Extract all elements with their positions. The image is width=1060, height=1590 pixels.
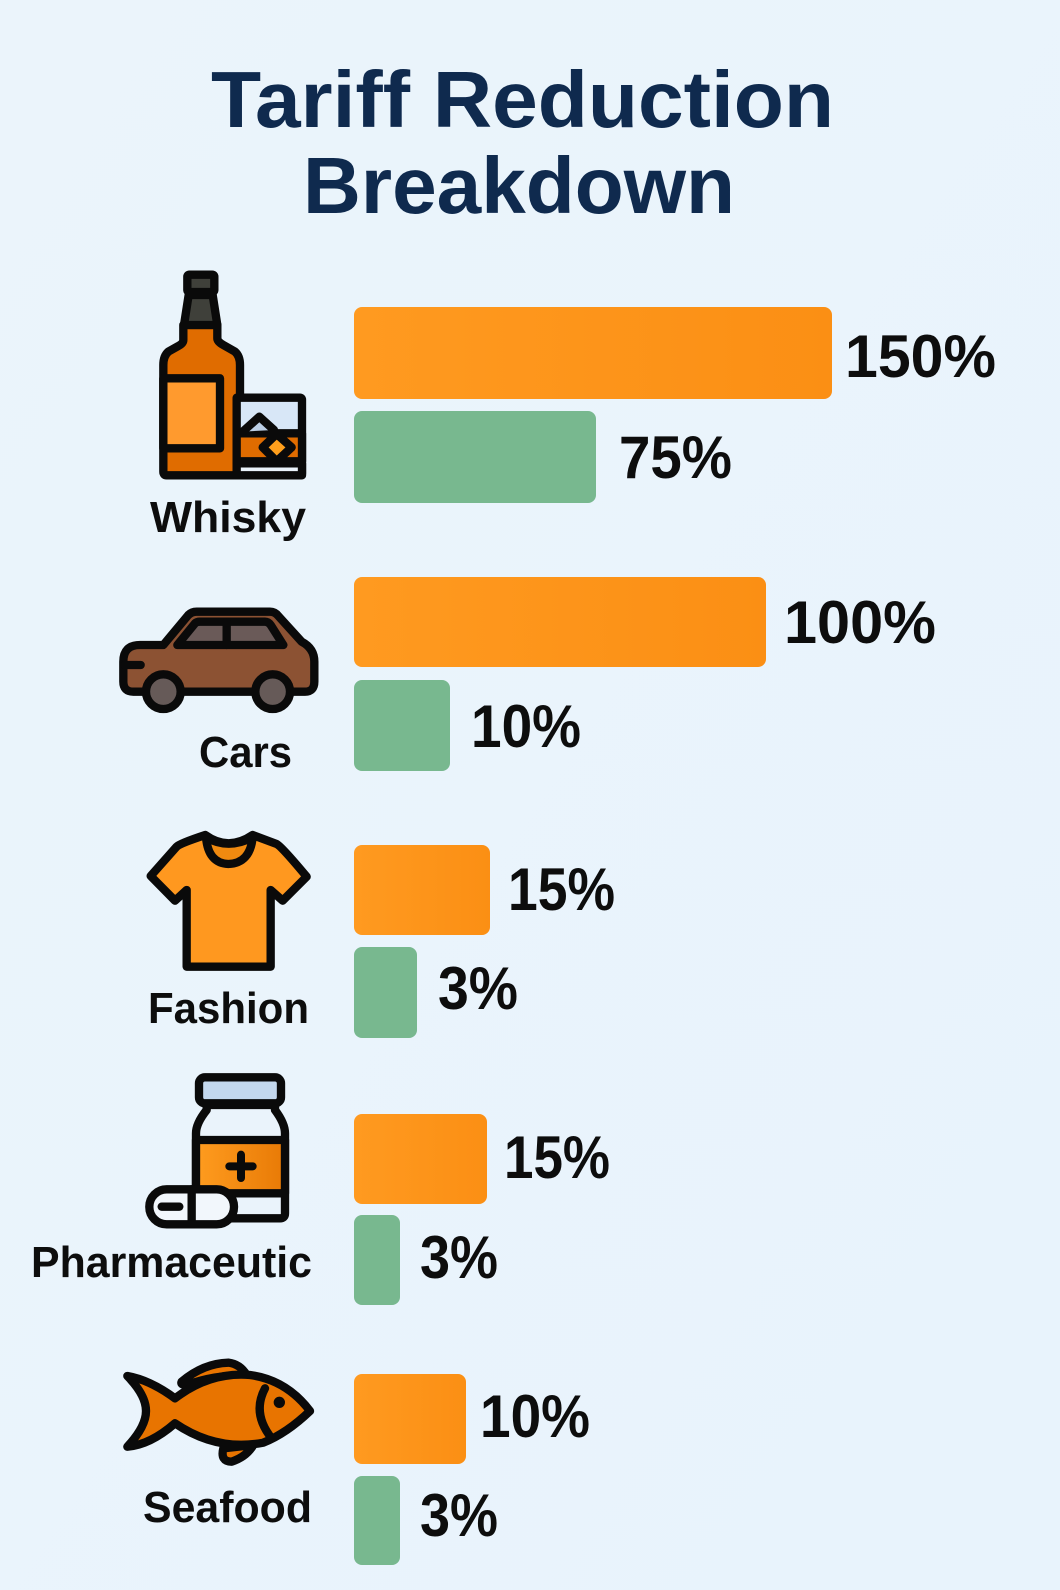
panel: fashion [148, 835, 615, 1038]
label: Fashion: Fashion [148, 984, 309, 1033]
icon: whisky bottle and glass [163, 275, 302, 475]
value: 150%: 150% [845, 323, 996, 390]
icon: fish [127, 1363, 310, 1462]
panel: seafood [127, 1363, 590, 1565]
label: Whisky: Whisky [150, 493, 307, 542]
value: 15%: 15% [504, 1124, 610, 1191]
icon: car [123, 612, 314, 709]
value: 3%: 3% [420, 1482, 498, 1549]
panel: whisky [150, 275, 996, 542]
bar: whisky before [354, 307, 832, 399]
title: Breakdown [303, 141, 735, 230]
value: 10%: 10% [480, 1383, 590, 1450]
title: Tariff Reduction [211, 55, 834, 144]
bar: seafood before [354, 1374, 466, 1464]
bar: pharmaceutic after [354, 1215, 400, 1305]
value: 75%: 75% [619, 424, 732, 491]
value: 100%: 100% [784, 589, 936, 656]
label: Seafood: Seafood [143, 1483, 312, 1532]
bar: seafood after [354, 1476, 400, 1565]
bar: whisky after [354, 411, 596, 503]
bar: fashion before [354, 845, 490, 935]
value: 3%: 3% [420, 1224, 498, 1291]
panel: pharmaceutic [31, 1077, 610, 1305]
bar: fashion after [354, 947, 417, 1038]
title [211, 55, 834, 230]
bar: pharmaceutic before [354, 1114, 487, 1204]
value: 3%: 3% [438, 955, 518, 1022]
bar: cars after [354, 680, 450, 771]
label: Cars: Cars [199, 728, 292, 777]
bar: cars before [354, 577, 766, 667]
value: 10%: 10% [471, 693, 581, 760]
icon: t-shirt [151, 835, 307, 967]
icon: medicine bottle and pill [149, 1077, 285, 1224]
label: Pharmaceutic: Pharmaceutic [31, 1238, 312, 1287]
value: 15%: 15% [508, 856, 615, 923]
panel: cars [123, 577, 936, 777]
